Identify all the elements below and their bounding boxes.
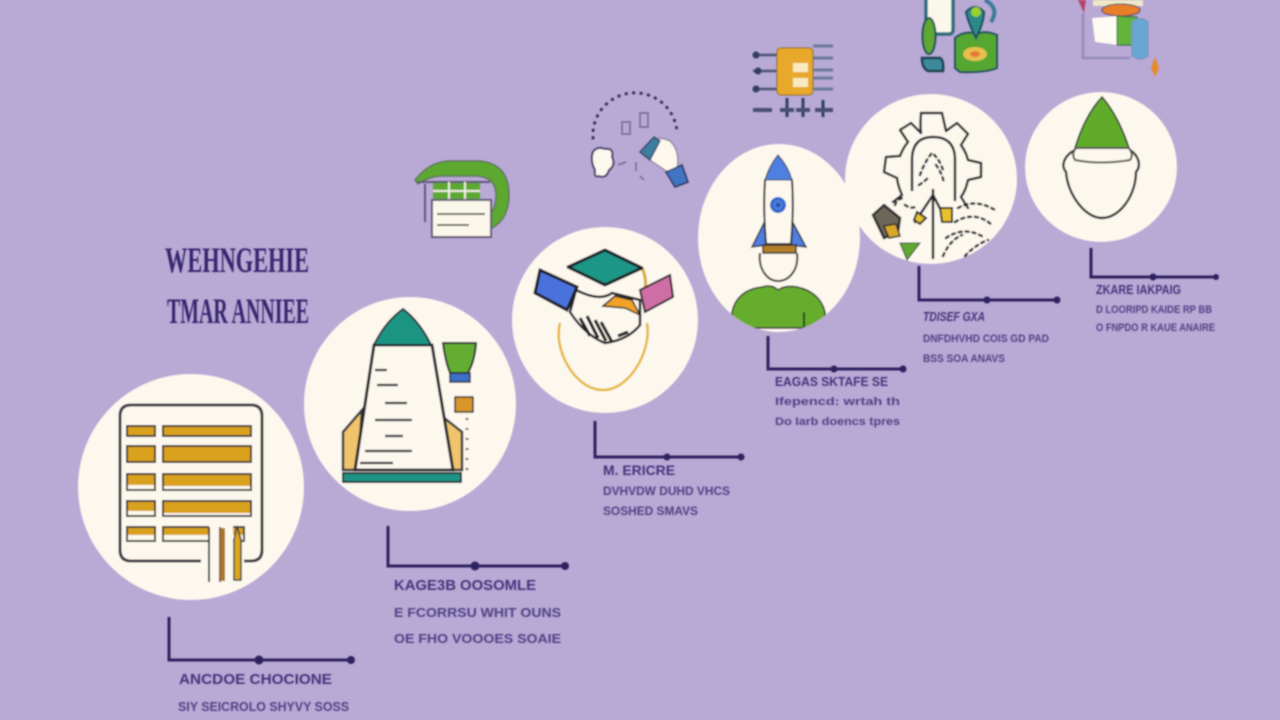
leader line 1 <box>169 617 355 664</box>
step 6 text: ZKARE IAKPAIG <box>1096 282 1181 297</box>
step 4 text: EAGAS SKTAFE SE <box>775 374 888 389</box>
step 1 text <box>178 671 349 714</box>
step 4 text: Do Iarb doencs tpres <box>775 416 900 428</box>
leader line 3 <box>595 421 744 460</box>
step 2 text: E FCORRSU WHIT OUNS <box>394 605 561 620</box>
icon: head with green hat <box>1063 97 1139 218</box>
step 4 text: Ifepencd: wrtah th <box>775 396 900 408</box>
step 2 text <box>394 577 561 646</box>
step 2 text: OE FHO VOOOES SOAIE <box>394 631 561 646</box>
icon: rocket document <box>343 309 476 482</box>
title: TMAR ANNIEE <box>167 291 309 331</box>
icon: chip diagram <box>752 46 833 117</box>
circle 6 <box>1025 92 1177 242</box>
circle 1 <box>78 374 304 600</box>
circle 2 <box>304 297 516 511</box>
step 5 text: DNFDHVHD COIS GD PAD <box>923 333 1049 345</box>
step 6 text <box>1096 282 1215 334</box>
panel: step 6 hat head <box>1025 92 1219 334</box>
panel: step 1 document <box>78 374 355 714</box>
step 1 text: ANCDOE CHOCIONE <box>179 671 332 688</box>
step 6 text: O FNPDO R KAUE ANAIRE <box>1096 322 1215 334</box>
icon: rocket and person <box>732 155 825 328</box>
step 1 text: SIY SEICROLO SHYVY SOSS <box>178 699 349 714</box>
step 3 text: M. ERICRE <box>603 462 675 478</box>
icon: map and pin <box>922 0 997 72</box>
step 3 text <box>603 462 730 518</box>
step 5 text <box>923 309 1049 365</box>
step 5 text: TDISEF GXA <box>923 309 985 324</box>
icon: cube and bottle <box>1078 0 1159 77</box>
leader line 5 <box>919 266 1060 304</box>
icon: gear and bulb <box>873 113 995 260</box>
circle 3 <box>512 227 698 413</box>
step 2 text: KAGE3B OOSOMLE <box>394 577 536 594</box>
icon: green arch and card <box>415 161 509 237</box>
panel: step 4 rocket launch <box>698 144 906 428</box>
icon: table document <box>120 405 262 583</box>
title <box>165 240 309 331</box>
icon: handshake <box>535 250 673 390</box>
circle 4 <box>698 144 860 332</box>
panel: step 5 gear bulb <box>845 94 1060 365</box>
title: WEHNGEHIE <box>165 240 309 280</box>
leader line 6 <box>1091 248 1219 280</box>
icon: dotted lightbulb <box>592 93 688 187</box>
circle 5 <box>845 94 1017 264</box>
step 3 text: DVHVDW DUHD VHCS <box>603 484 730 498</box>
panel: step 3 handshake <box>512 227 744 518</box>
panel: step 2 rocket <box>304 297 569 646</box>
leader line 2 <box>388 526 569 570</box>
step 6 text: D LOORIPD KAIDE RP BB <box>1096 304 1212 316</box>
step 5 text: BSS SOA ANAVS <box>923 353 1005 365</box>
step 3 text: SOSHED SMAVS <box>603 504 698 518</box>
leader line 4 <box>768 336 906 372</box>
step 4 text <box>775 374 900 428</box>
